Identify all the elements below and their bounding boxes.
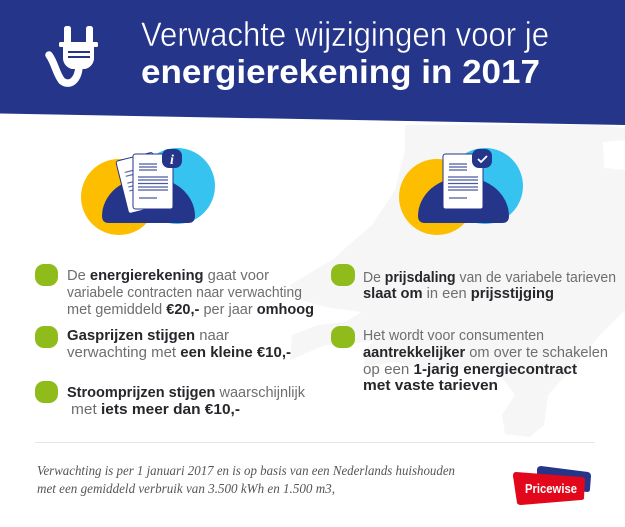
footnote: met een gemiddeld verbruik van 3.500 kWh en 1.500 m3, [37,481,335,496]
bullet: energierekening [35,264,314,318]
bullet: energierekening: De energierekening gaat voor [67,267,269,284]
footnote: Verwachting is per 1 januari 2017 en is op basis van een Nederlands huishouden [37,463,455,478]
bullet: energierekening: met gemiddeld €20,- per jaar omhoog [67,301,314,318]
icon: electric plug [49,26,98,83]
icon: document with check badge [399,148,523,235]
bullet: overstappen: met vaste tarieven [363,377,498,394]
footnote [37,463,455,496]
bullet: gasprijzen: Gasprijzen stijgen naar [67,327,229,344]
bullet: overstappen: op een 1-jarig energiecontract [363,361,577,378]
bullet: gasprijzen [35,326,291,361]
background map of the Netherlands [290,125,625,437]
icon: documents with info badge [81,148,215,235]
logo: Pricewise: Pricewise [525,481,577,496]
bullet: energierekening: variabele contracten naar verwachting [67,284,302,301]
bullet: prijsdaling: slaat om in een prijsstijging [363,285,554,302]
header banner [0,0,625,125]
bullet: prijsdaling: De prijsdaling van de variabele tarieven [363,269,616,286]
bullet: overstappen: Het wordt voor consumenten [363,327,544,344]
bullet: gasprijzen: verwachting met een kleine €10,- [67,344,291,361]
bullet: overstappen [331,326,608,394]
bullet: stroomprijzen [35,381,305,418]
bullet: overstappen: aantrekkelijker om over te schakelen [363,344,608,361]
bullet: stroomprijzen: met iets meer dan €10,- [71,401,240,418]
title: Verwachte wijzigingen voor je [141,16,549,54]
logo: Pricewise [513,466,591,505]
bullet: stroomprijzen: Stroomprijzen stijgen waarschijnlijk [67,384,305,401]
icon: documents with info badge: i [170,153,174,168]
title [141,16,549,90]
title: energierekening in 2017 [141,53,540,90]
bullet: prijsdaling [331,264,616,302]
